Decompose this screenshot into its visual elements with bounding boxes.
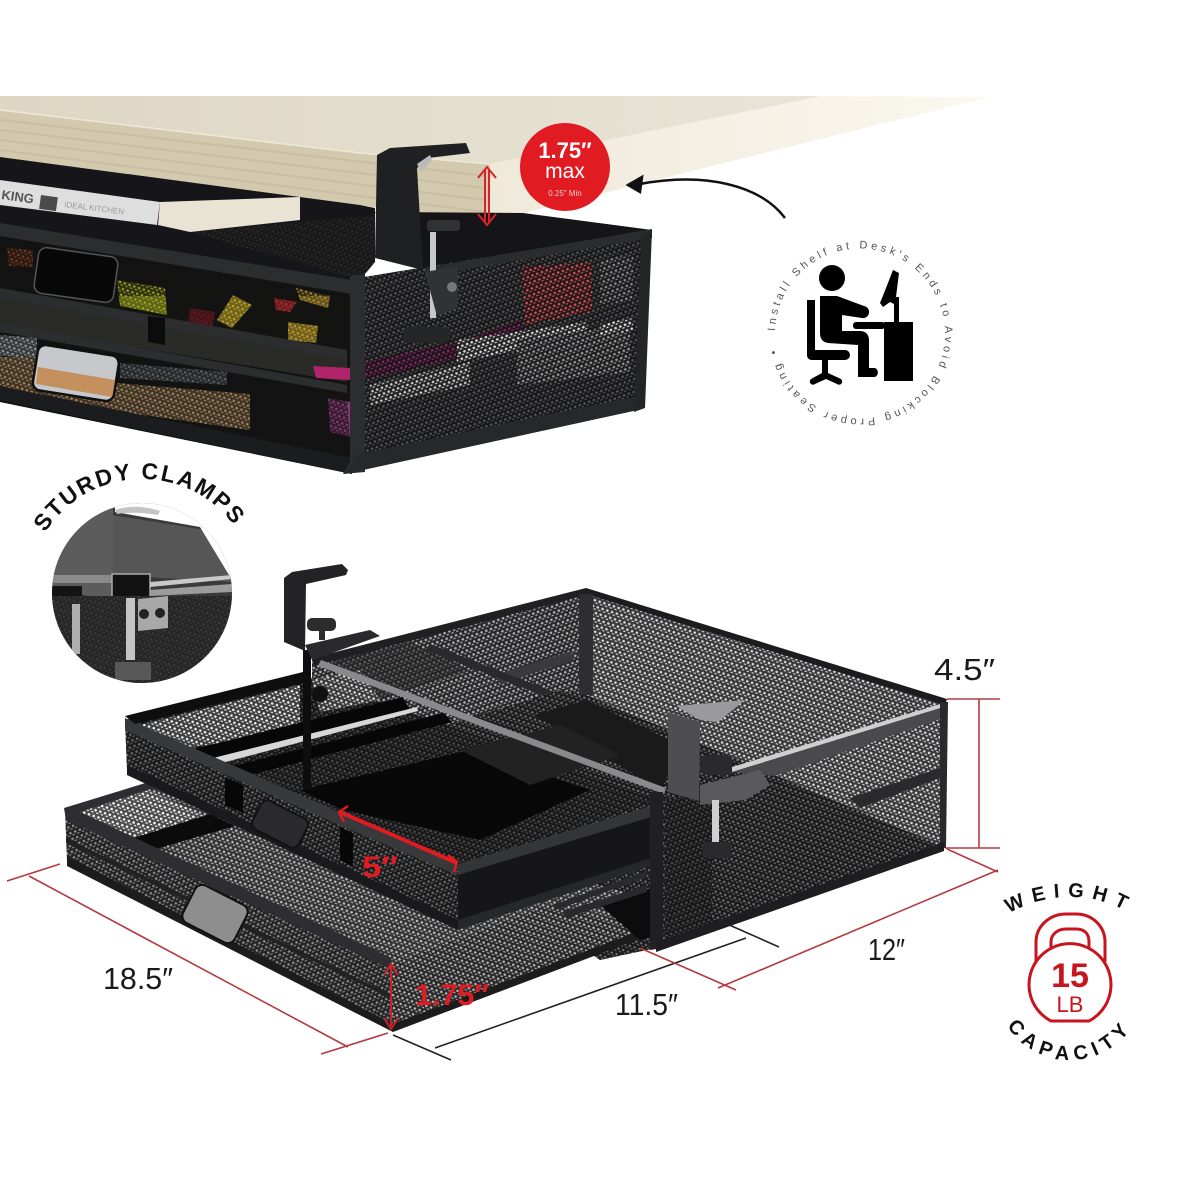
CAPACITY heading: CAPACITY	[1010, 1020, 1126, 1060]
dimension: 1.75 inch: 1.75″	[415, 979, 489, 1012]
left clamp	[284, 564, 380, 702]
drawer front contents	[0, 232, 352, 474]
badge: clamp range	[520, 123, 610, 211]
dimension: 11.5 inch	[393, 920, 779, 1060]
icon: kettlebell	[1029, 914, 1111, 1021]
sturdy clamps callout	[34, 463, 244, 683]
dimension: 11.5 inch: 11.5″	[615, 987, 678, 1022]
badge: clamp range: 0.25″ Min	[548, 189, 582, 198]
desk top with clamp and installed drawer	[0, 96, 990, 474]
arrow pointing to desk end	[628, 177, 785, 218]
right clamp	[668, 700, 770, 858]
upper drawer	[125, 670, 661, 930]
drawer right mesh panel	[350, 230, 652, 472]
dimension: 18.5 inch	[7, 864, 388, 1054]
mesh top of drawer behind book	[190, 216, 375, 280]
badge: clamp range: 1.75″	[538, 138, 592, 163]
main shelf floor	[300, 690, 944, 960]
main shelf back walls	[312, 590, 947, 847]
clamp close-up photo	[52, 503, 232, 686]
book on drawer	[0, 180, 300, 232]
badge: clamp range: max	[545, 160, 585, 183]
dimension: 12 inch	[640, 849, 998, 990]
drawer pull cutouts	[32, 247, 120, 402]
lower drawer	[64, 781, 660, 1032]
desk clamp	[375, 143, 470, 343]
dimension: 5 inch: 5″	[362, 851, 398, 884]
circular note text: Install Shelf at Desk's Ends to Avoid Blocking Proper Seating •	[768, 240, 953, 426]
dimension: 12 inch: 12″	[868, 932, 905, 967]
weight capacity badge	[1003, 883, 1130, 1060]
dimension: 4.5 inch: 4.5″	[934, 652, 995, 687]
red height arrow	[478, 167, 496, 225]
book on drawer: IDEAL KITCHEN	[64, 200, 125, 216]
desk surface	[0, 96, 990, 223]
icon: kettlebell: LB	[1057, 992, 1083, 1017]
book on drawer: KING	[1, 187, 35, 206]
WEIGHT heading: WEIGHT	[1003, 883, 1130, 912]
dark space under desk	[0, 157, 375, 282]
icon: kettlebell: 15	[1051, 957, 1089, 995]
dimension: 18.5 inch: 18.5″	[103, 961, 173, 996]
install note badge	[768, 240, 953, 426]
drawer frame rails	[0, 223, 652, 474]
icon: person seated at desk	[807, 265, 913, 385]
drawer interior	[375, 212, 652, 270]
product with dimensions	[7, 564, 1000, 1060]
heading: STURDY CLAMPS	[34, 463, 244, 530]
dimension: 1.75 inch	[384, 964, 489, 1029]
dimension: 5 inch	[339, 806, 457, 884]
dimension: 4.5 inch	[934, 652, 1000, 848]
photo top highlight	[115, 507, 160, 515]
main shelf front and rails	[303, 588, 948, 952]
